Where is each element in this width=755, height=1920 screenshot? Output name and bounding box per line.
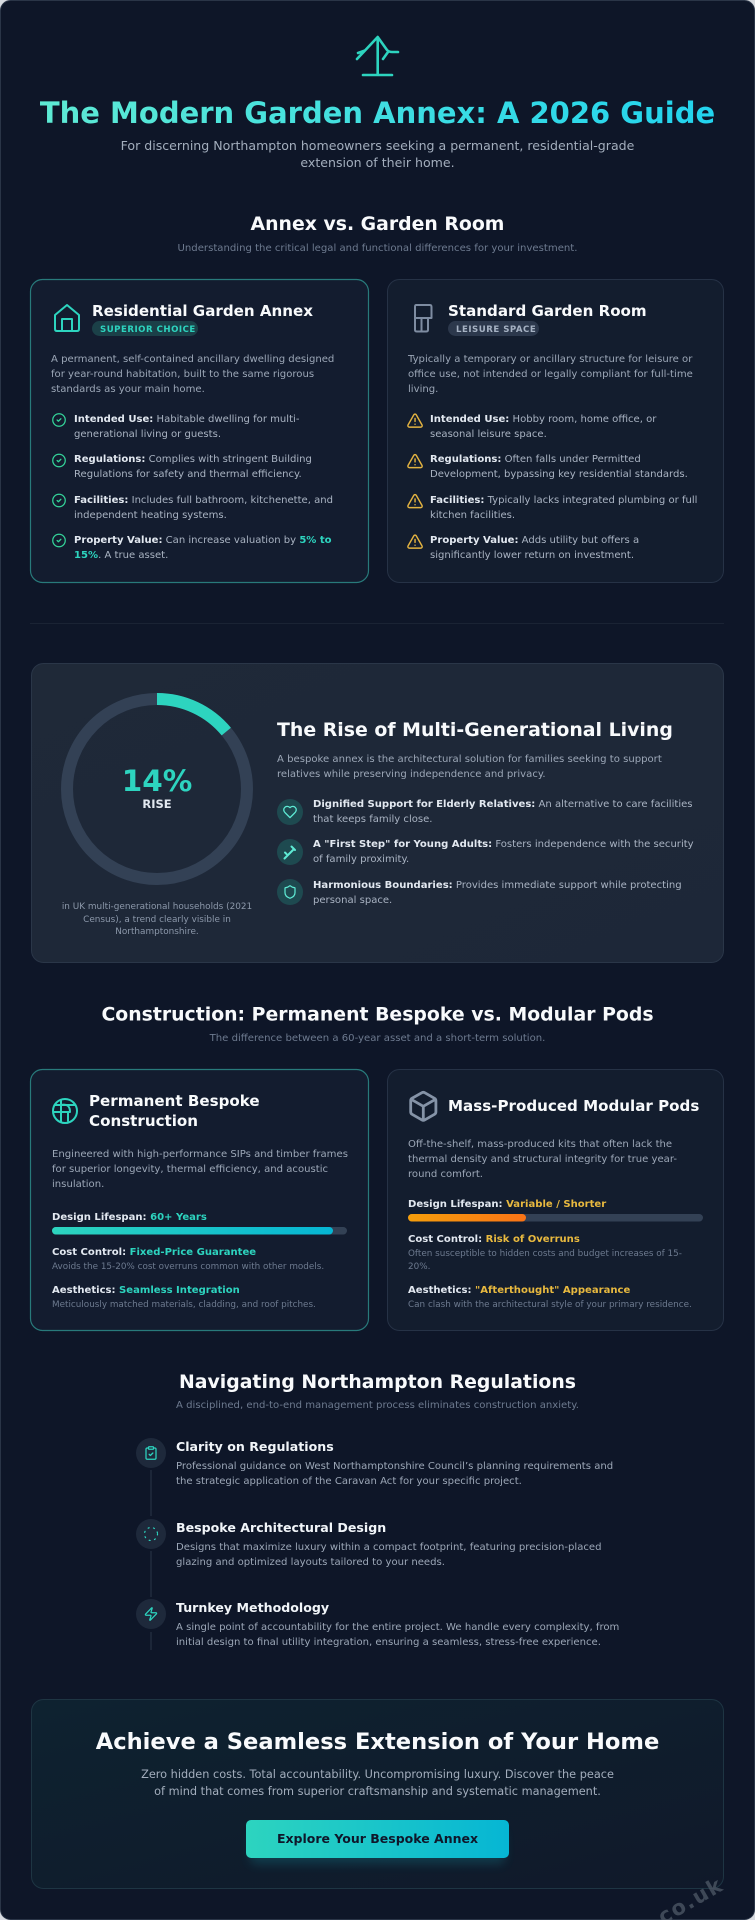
chart: 14% rise ring: 14% — [122, 764, 192, 798]
metric: cost control: Often susceptible to hidden costs and budget increases of 15- — [408, 1249, 682, 1259]
heading: regulations: Navigating Northampton Regulations — [179, 1372, 576, 1393]
benefit: elderly relatives — [277, 799, 693, 825]
panel heading: The Rise of Multi-Generational Living — [277, 719, 673, 741]
card description — [407, 354, 693, 395]
step: turnkey methodology: Turnkey Methodology — [176, 1600, 329, 1615]
step: turnkey methodology: A single point of accountability for the entire project. We handle every complexity, from — [176, 1622, 619, 1633]
step: bespoke architectural design: Bespoke Architectural Design — [176, 1520, 386, 1535]
step: bespoke architectural design: Designs that maximize luxury within a compact footprint, featuring precision-placed — [176, 1542, 602, 1553]
card description: standards as your main home. — [51, 384, 205, 395]
heading: construction: The difference between a 60-year asset and a short-term solution. — [209, 1033, 545, 1044]
list item: property value: 15%. A true asset. — [74, 550, 168, 561]
list item: facilities: Facilities: Includes full bathroom, kitchenette, and — [74, 495, 333, 506]
step: bespoke architectural design — [136, 1519, 602, 1597]
list item: facilities — [408, 495, 697, 521]
card description — [51, 354, 334, 395]
list item: property value — [408, 535, 639, 561]
metric: design lifespan — [52, 1212, 347, 1234]
card heading — [89, 1092, 260, 1130]
list item: intended use: generational living or guests. — [74, 429, 221, 440]
panel description — [277, 754, 662, 780]
badge: leisure space — [448, 321, 539, 336]
list item: regulations: Regulations for safety and thermal efficiency. — [74, 469, 302, 480]
metric: cost control: Cost Control: Fixed-Price Guarantee — [52, 1247, 256, 1258]
step: clarity on regulations: Clarity on Regulations — [176, 1439, 334, 1454]
list item: intended use: seasonal leisure space. — [430, 429, 547, 440]
call to action text: of mind that comes from superior craftsmanship and systematic management. — [154, 1785, 601, 1798]
heading: regulations — [176, 1372, 579, 1411]
list item: property value — [53, 534, 332, 561]
metric: aesthetics: Meticulously matched materials, cladding, and roof pitches. — [52, 1300, 316, 1310]
card description: thermal density and structural integrity for true year- — [408, 1154, 677, 1165]
card description: Engineered with high-performance SIPs and timber frames — [52, 1149, 348, 1160]
card description: for superior longevity, thermal efficiency, and acoustic — [52, 1164, 328, 1175]
button: explore — [246, 1820, 509, 1864]
step: bespoke architectural design: glazing and optimized layouts tailored to your needs. — [176, 1557, 445, 1568]
panel description: relatives while preserving independence and privacy. — [277, 769, 546, 780]
heading: annex vs garden room: Understanding the critical legal and functional differences for your investment. — [178, 243, 577, 254]
panel: multi-generational living — [32, 664, 724, 962]
ring caption: Census), a trend clearly visible in — [83, 915, 231, 925]
ring caption: in UK multi-generational households (2021 — [62, 902, 252, 912]
benefit: young adults: A "First Step" for Young Adults: Fosters independence with the security — [313, 839, 694, 850]
metric: cost control — [408, 1234, 682, 1272]
panel: call to action — [32, 1700, 724, 1888]
metric: aesthetics: Can clash with the architectural style of your primary residence. — [408, 1300, 692, 1310]
icon: garden room — [415, 305, 432, 332]
step: turnkey methodology: initial design to final utility integration, ensuring a seamless, stress-free experience. — [176, 1637, 601, 1648]
card description: insulation. — [52, 1179, 104, 1190]
panel: standard garden room — [388, 280, 724, 582]
metric: cost control: 20%. — [408, 1262, 430, 1272]
chart: 14% rise ring: RISE — [142, 797, 172, 811]
badge: leisure space: LEISURE SPACE — [456, 325, 536, 335]
card description — [408, 1139, 677, 1180]
heading: construction — [101, 1004, 654, 1044]
call to action heading: Achieve a Seamless Extension of Your Home — [96, 1729, 659, 1755]
list item: facilities: kitchen facilities. — [430, 510, 515, 521]
call to action text — [141, 1768, 614, 1798]
heading: regulations: A disciplined, end-to-end management process eliminates construction anxiety. — [176, 1400, 579, 1411]
card heading: Residential Garden Annex — [92, 302, 313, 320]
panel: modular pods — [388, 1070, 724, 1330]
benefit: boundaries: personal space. — [313, 895, 392, 906]
card description — [52, 1149, 348, 1190]
metric: cost control: Cost Control: Risk of Overruns — [408, 1234, 580, 1245]
benefit: boundaries: Harmonious Boundaries: Provides immediate support while protecting — [313, 880, 682, 891]
card heading: Standard Garden Room — [448, 302, 647, 320]
call to action text: Zero hidden costs. Total accountability. Uncompromising luxury. Discover the peace — [141, 1768, 614, 1781]
list item: regulations: Regulations: Complies with stringent Building — [74, 454, 312, 465]
benefit: young adults — [277, 839, 694, 865]
metric: aesthetics — [52, 1285, 316, 1310]
subtitle: extension of their home. — [300, 155, 455, 170]
list item: intended use: Intended Use: Habitable dwelling for multi- — [74, 414, 300, 425]
list item: facilities: Facilities: Typically lacks integrated plumbing or full — [430, 495, 697, 506]
benefit: elderly relatives: Dignified Support for Elderly Relatives: An alternative to care facilities — [313, 799, 693, 810]
card description: round comfort. — [408, 1169, 483, 1180]
badge: superior choice: SUPERIOR CHOICE — [100, 325, 196, 335]
heading: annex vs garden room: Annex vs. Garden Room — [251, 214, 504, 235]
heading: construction: Construction: Permanent Bespoke vs. Modular Pods — [101, 1004, 654, 1026]
panel: residential garden annex — [30, 280, 368, 582]
panel description: A bespoke annex is the architectural solution for families seeking to support — [277, 754, 662, 765]
card heading: Mass-Produced Modular Pods — [448, 1097, 699, 1115]
title: The Modern Garden Annex: A 2026 Guide — [40, 96, 715, 130]
list item: facilities — [53, 494, 333, 521]
ring caption: Northamptonshire. — [115, 927, 199, 937]
metric: design lifespan — [408, 1199, 703, 1222]
metric: aesthetics — [408, 1285, 692, 1310]
metric: cost control — [52, 1247, 324, 1272]
benefit: boundaries — [277, 879, 682, 906]
card description: living. — [408, 384, 438, 395]
metric: cost control: Avoids the 15-20% cost overruns common with other models. — [52, 1262, 324, 1272]
list item: intended use: Intended Use: Hobby room, home office, or — [430, 414, 657, 425]
button: explore: Explore Your Bespoke Annex — [277, 1831, 478, 1846]
card description: Typically a temporary or ancillary structure for leisure or — [407, 354, 693, 365]
list item: property value: significantly lower return on investment. — [430, 550, 634, 561]
panel: permanent bespoke construction — [30, 1070, 368, 1330]
step: clarity on regulations — [136, 1438, 613, 1516]
benefit: elderly relatives: that keeps family close. — [313, 814, 432, 825]
metric: aesthetics: Aesthetics: "Afterthought" Appearance — [408, 1285, 630, 1296]
card description: office use, not intended or legally compliant for full-time — [408, 369, 693, 380]
icon: globe — [53, 1099, 77, 1123]
list item: property value: Property Value: Adds utility but offers a — [430, 535, 639, 546]
list item: intended use — [53, 414, 300, 440]
metric: aesthetics: Aesthetics: Seamless Integration — [52, 1285, 240, 1296]
list item: intended use — [408, 414, 657, 440]
card description: for year-round habitation, built to the same rigorous — [51, 369, 314, 380]
card description: Off-the-shelf, mass-produced kits that often lack the — [408, 1139, 672, 1150]
card heading: Construction — [89, 1112, 198, 1130]
chart: 14% rise ring — [67, 699, 247, 879]
icon: house — [55, 305, 79, 331]
step: turnkey methodology — [136, 1599, 619, 1650]
card description: A permanent, self-contained ancillary dwelling designed — [51, 354, 334, 365]
list item: regulations — [408, 454, 688, 480]
metric: design lifespan: Design Lifespan: 60+ Years — [52, 1212, 207, 1223]
subtitle — [121, 138, 635, 170]
list item: regulations: Regulations: Often falls under Permitted — [430, 454, 641, 465]
ring caption — [62, 902, 252, 937]
badge: superior choice — [92, 321, 198, 336]
list item: regulations — [53, 454, 312, 480]
subtitle: For discerning Northampton homeowners seeking a permanent, residential-grade — [121, 138, 635, 153]
metric: design lifespan: Design Lifespan: Variable / Shorter — [408, 1199, 606, 1210]
list item: property value: Property Value: Can increase valuation by 5% to — [74, 535, 332, 546]
heading: annex vs garden room — [178, 214, 577, 254]
icon: header roof — [357, 37, 398, 75]
icon: cube — [411, 1092, 436, 1120]
card heading: Permanent Bespoke — [89, 1092, 260, 1110]
benefit: young adults: of family proximity. — [313, 854, 409, 865]
list item: facilities: independent heating systems. — [74, 510, 227, 521]
step: clarity on regulations: the strategic application of the Caravan Act for your specific project. — [176, 1476, 522, 1487]
list item: regulations: Development, bypassing key residential standards. — [430, 469, 688, 480]
step: clarity on regulations: Professional guidance on West Northamptonshire Council’s planning requirements and — [176, 1461, 613, 1472]
